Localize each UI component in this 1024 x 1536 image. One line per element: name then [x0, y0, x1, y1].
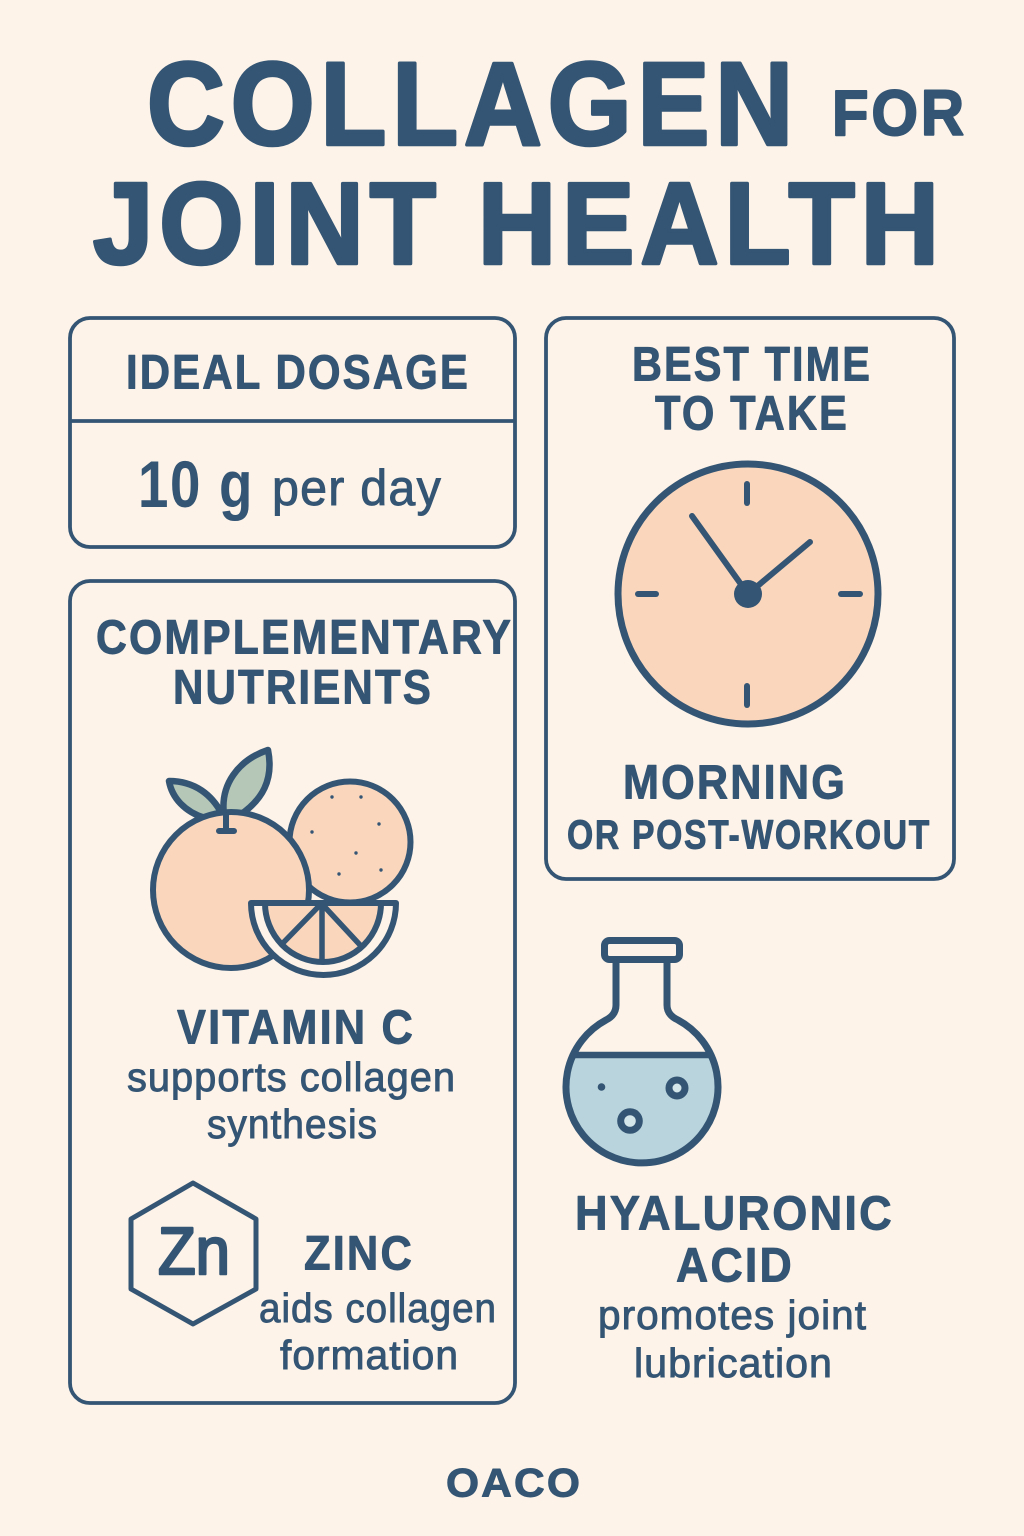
panel: complementary nutrients [70, 581, 515, 1403]
heading: best time to take: TO TAKE [655, 388, 849, 440]
title: COLLAGEN [147, 38, 799, 170]
text: morning or post-workout [567, 756, 931, 858]
title: JOINT HEALTH [93, 158, 945, 288]
heading: complementary nutrients: COMPLEMENTARY [96, 612, 513, 664]
heading: best time to take: BEST TIME [632, 338, 872, 392]
heading: ideal dosage: IDEAL DOSAGE [126, 346, 470, 400]
panel: ideal dosage [70, 318, 515, 547]
text: morning or post-workout: OR POST-WORKOUT [567, 812, 931, 858]
icon: zinc hexagon [131, 1183, 256, 1324]
dosage value: per day [272, 460, 442, 516]
dosage value: 10 g [138, 447, 254, 521]
text: vitamin c: supports collagen [127, 1054, 456, 1100]
text: hyaluronic acid: ACID [676, 1240, 794, 1292]
heading: complementary nutrients [96, 612, 513, 714]
text: zinc [259, 1228, 497, 1378]
text: vitamin c [127, 1002, 456, 1147]
icon: clock [618, 464, 878, 724]
text: hyaluronic acid: HYALURONIC [575, 1188, 894, 1240]
dosage value [138, 447, 442, 521]
title: FOR [832, 77, 967, 149]
text: zinc: ZINC [304, 1228, 414, 1280]
text: vitamin c: synthesis [207, 1101, 378, 1147]
icon: zinc hexagon: Zn [158, 1214, 230, 1289]
text: vitamin c: VITAMIN C [177, 1002, 415, 1054]
text: hyaluronic acid [575, 1188, 894, 1386]
text: hyaluronic acid: promotes joint [598, 1292, 867, 1338]
footer brand: OACO [446, 1462, 582, 1506]
panel: best time to take [546, 318, 954, 879]
heading: best time to take [632, 338, 872, 440]
icon: flask [566, 940, 718, 1165]
title [93, 38, 967, 288]
text: zinc: aids collagen [259, 1285, 497, 1331]
icon: oranges [153, 750, 410, 975]
text: morning or post-workout: MORNING [623, 756, 847, 810]
heading: complementary nutrients: NUTRIENTS [173, 662, 433, 714]
text: hyaluronic acid: lubrication [634, 1340, 833, 1386]
text: zinc: formation [280, 1332, 459, 1378]
